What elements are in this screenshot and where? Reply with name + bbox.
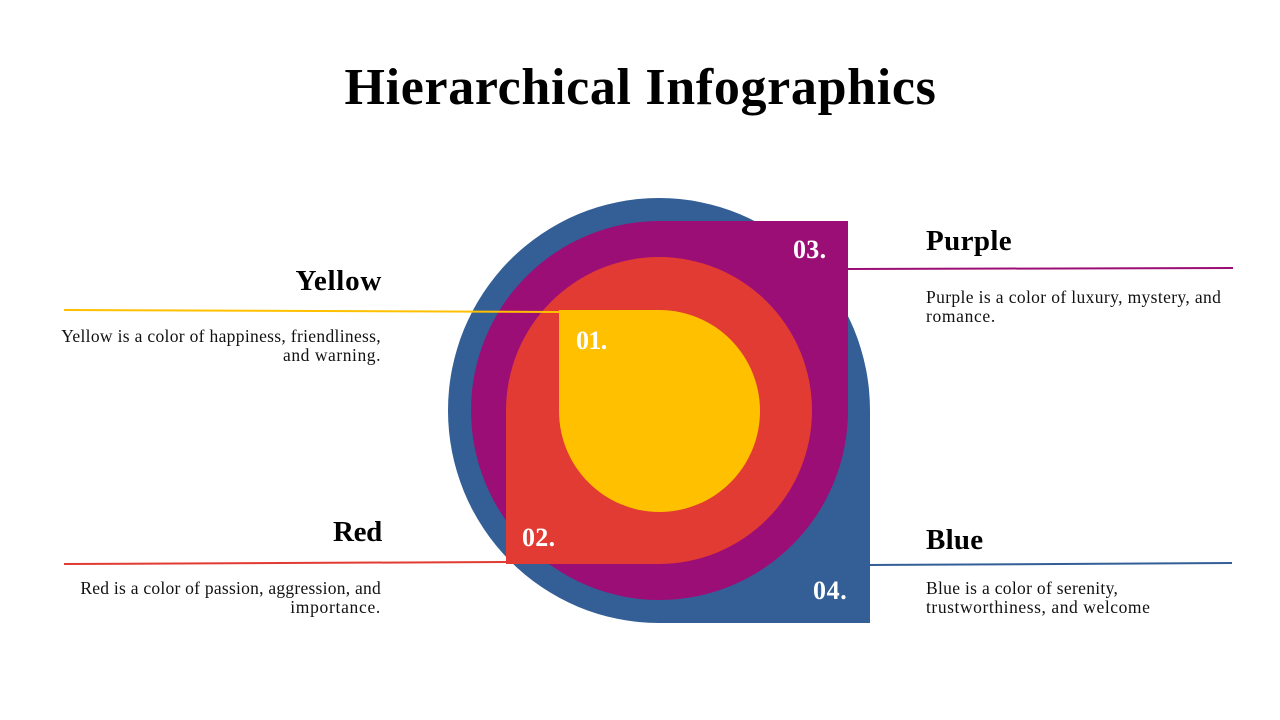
heading: Purple: Purple: [926, 225, 1012, 257]
text: Blue description: trustworthiness, and welcome: [926, 597, 1150, 617]
text: Blue description: [926, 578, 1150, 617]
red shape: [506, 257, 812, 564]
text: Purple description: Purple is a color of luxury, mystery, and: [926, 287, 1221, 307]
title: Hierarchical Infographics: [344, 59, 937, 116]
yellow shape: [559, 310, 760, 512]
text: Red description: Red is a color of passion, aggression, and: [80, 578, 381, 598]
blue shape: [448, 198, 870, 623]
heading: Blue: Blue: [926, 524, 983, 556]
text: Purple description: [926, 287, 1221, 326]
number 01: 01.: [576, 326, 607, 355]
text: Purple description: romance.: [926, 306, 996, 326]
yellow connector line: [64, 310, 559, 312]
purple connector line: [848, 268, 1233, 269]
text: Blue description: Blue is a color of serenity,: [926, 578, 1118, 598]
number 03: 03.: [793, 235, 826, 264]
text: Yellow description: [61, 326, 381, 365]
text: Red description: importance.: [290, 597, 381, 617]
number 02: 02.: [522, 523, 555, 552]
heading: Red: Red: [333, 516, 382, 548]
blue connector line: [870, 563, 1232, 565]
purple shape: [471, 221, 848, 600]
red connector line: [64, 562, 506, 564]
text: Yellow description: Yellow is a color of happiness, friendliness,: [61, 326, 381, 346]
text: Red description: [80, 578, 381, 617]
heading: Yellow: Yellow: [295, 265, 382, 297]
text: Yellow description: and warning.: [283, 345, 381, 365]
number 04: 04.: [813, 576, 847, 605]
